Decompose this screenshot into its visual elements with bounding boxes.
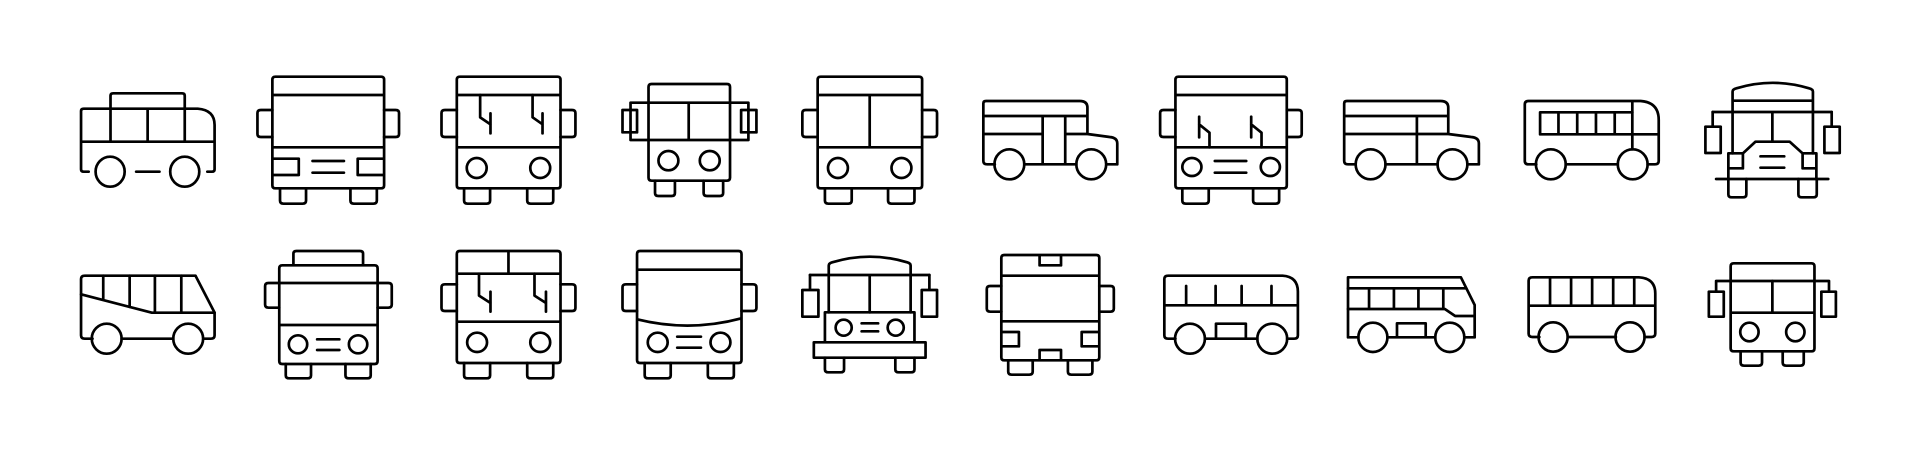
mirrors (987, 286, 1114, 312)
icon: school bus side with door (983, 101, 1117, 179)
wheels (1175, 324, 1287, 354)
wheels (1741, 351, 1804, 366)
mirrors (1709, 281, 1836, 317)
wheels (280, 188, 377, 204)
icon: front bus with split destination board (442, 251, 575, 378)
body (1731, 263, 1814, 351)
wheels (96, 157, 199, 187)
headlights (467, 333, 550, 352)
grille and bumper (814, 312, 926, 358)
body (637, 251, 742, 363)
icon: front bus with headlight boxes (257, 77, 399, 204)
wheels (994, 149, 1106, 179)
body (983, 101, 1117, 164)
mirrors (623, 103, 756, 140)
mirrors (257, 110, 399, 137)
headlights (467, 158, 550, 178)
body (1713, 83, 1832, 153)
body (81, 93, 215, 172)
wheels (1358, 323, 1464, 352)
wheels (286, 364, 371, 378)
body (1175, 77, 1287, 188)
icon: school bus side (1344, 101, 1479, 179)
icon: small front bus with square mirrors (623, 84, 756, 196)
wheels (825, 358, 914, 372)
windows (81, 276, 215, 313)
wheels (1182, 188, 1279, 204)
body (649, 84, 730, 181)
body (81, 276, 215, 339)
icon: rear bus with notches (987, 255, 1114, 375)
wheels (1008, 360, 1092, 375)
body (272, 77, 384, 188)
mirrors (802, 110, 937, 137)
icon: front bus with split windscreen (802, 77, 937, 204)
mirrors (802, 275, 937, 317)
windows (1540, 112, 1632, 134)
headlights (1182, 158, 1280, 176)
icon: school bus front with hood (1705, 83, 1840, 197)
icon: front bus with wipers (442, 77, 575, 204)
mirrors (442, 284, 575, 311)
windows (1348, 288, 1475, 316)
wheels (464, 188, 553, 204)
icon: side coach with slanted windows (81, 276, 215, 354)
icon: school bus front with bumper (802, 257, 937, 372)
headlights (836, 320, 904, 336)
wheels (645, 363, 734, 378)
body (1348, 277, 1475, 337)
mirrors (1705, 112, 1840, 153)
icon: side bus with tall windows (1529, 277, 1655, 352)
icon: side bus with window strip (1525, 101, 1659, 179)
body (1164, 276, 1298, 339)
wheels (1356, 149, 1467, 179)
icon: front bus with curved windscreen (623, 251, 756, 378)
wheels (1536, 149, 1648, 179)
body (1001, 255, 1099, 360)
mirrors (265, 283, 392, 308)
icon: front bus with roof unit (265, 251, 392, 378)
icon: side bus with centre box (1164, 276, 1298, 354)
headlights (648, 333, 730, 352)
headlights (828, 158, 911, 178)
wipers (1199, 117, 1262, 147)
body (810, 257, 929, 312)
headlights (658, 151, 720, 170)
icon: side coach with angled front (1348, 277, 1475, 352)
headlights (1740, 323, 1805, 341)
mirrors (1160, 110, 1302, 137)
icon: side bus with roof box (81, 93, 215, 187)
mirrors (623, 284, 756, 311)
body (1529, 277, 1655, 337)
wheels (1728, 179, 1817, 197)
wipers (480, 95, 543, 133)
wheels (825, 188, 914, 204)
body (457, 77, 561, 188)
body (279, 251, 378, 364)
mirrors (442, 110, 575, 137)
wheels (655, 181, 723, 196)
body (1525, 101, 1659, 164)
icon: front bus with short wipers (1160, 77, 1302, 204)
hood and bumper (1716, 142, 1828, 179)
body (457, 251, 561, 363)
icon: small front bus with hanging mirrors (1709, 263, 1836, 366)
wheels (1539, 322, 1645, 352)
windows (1550, 277, 1634, 306)
wheels (464, 363, 553, 378)
body (1344, 101, 1479, 164)
headlights (289, 335, 367, 353)
body (818, 77, 922, 188)
wheels (92, 324, 203, 354)
wipers (479, 274, 546, 312)
